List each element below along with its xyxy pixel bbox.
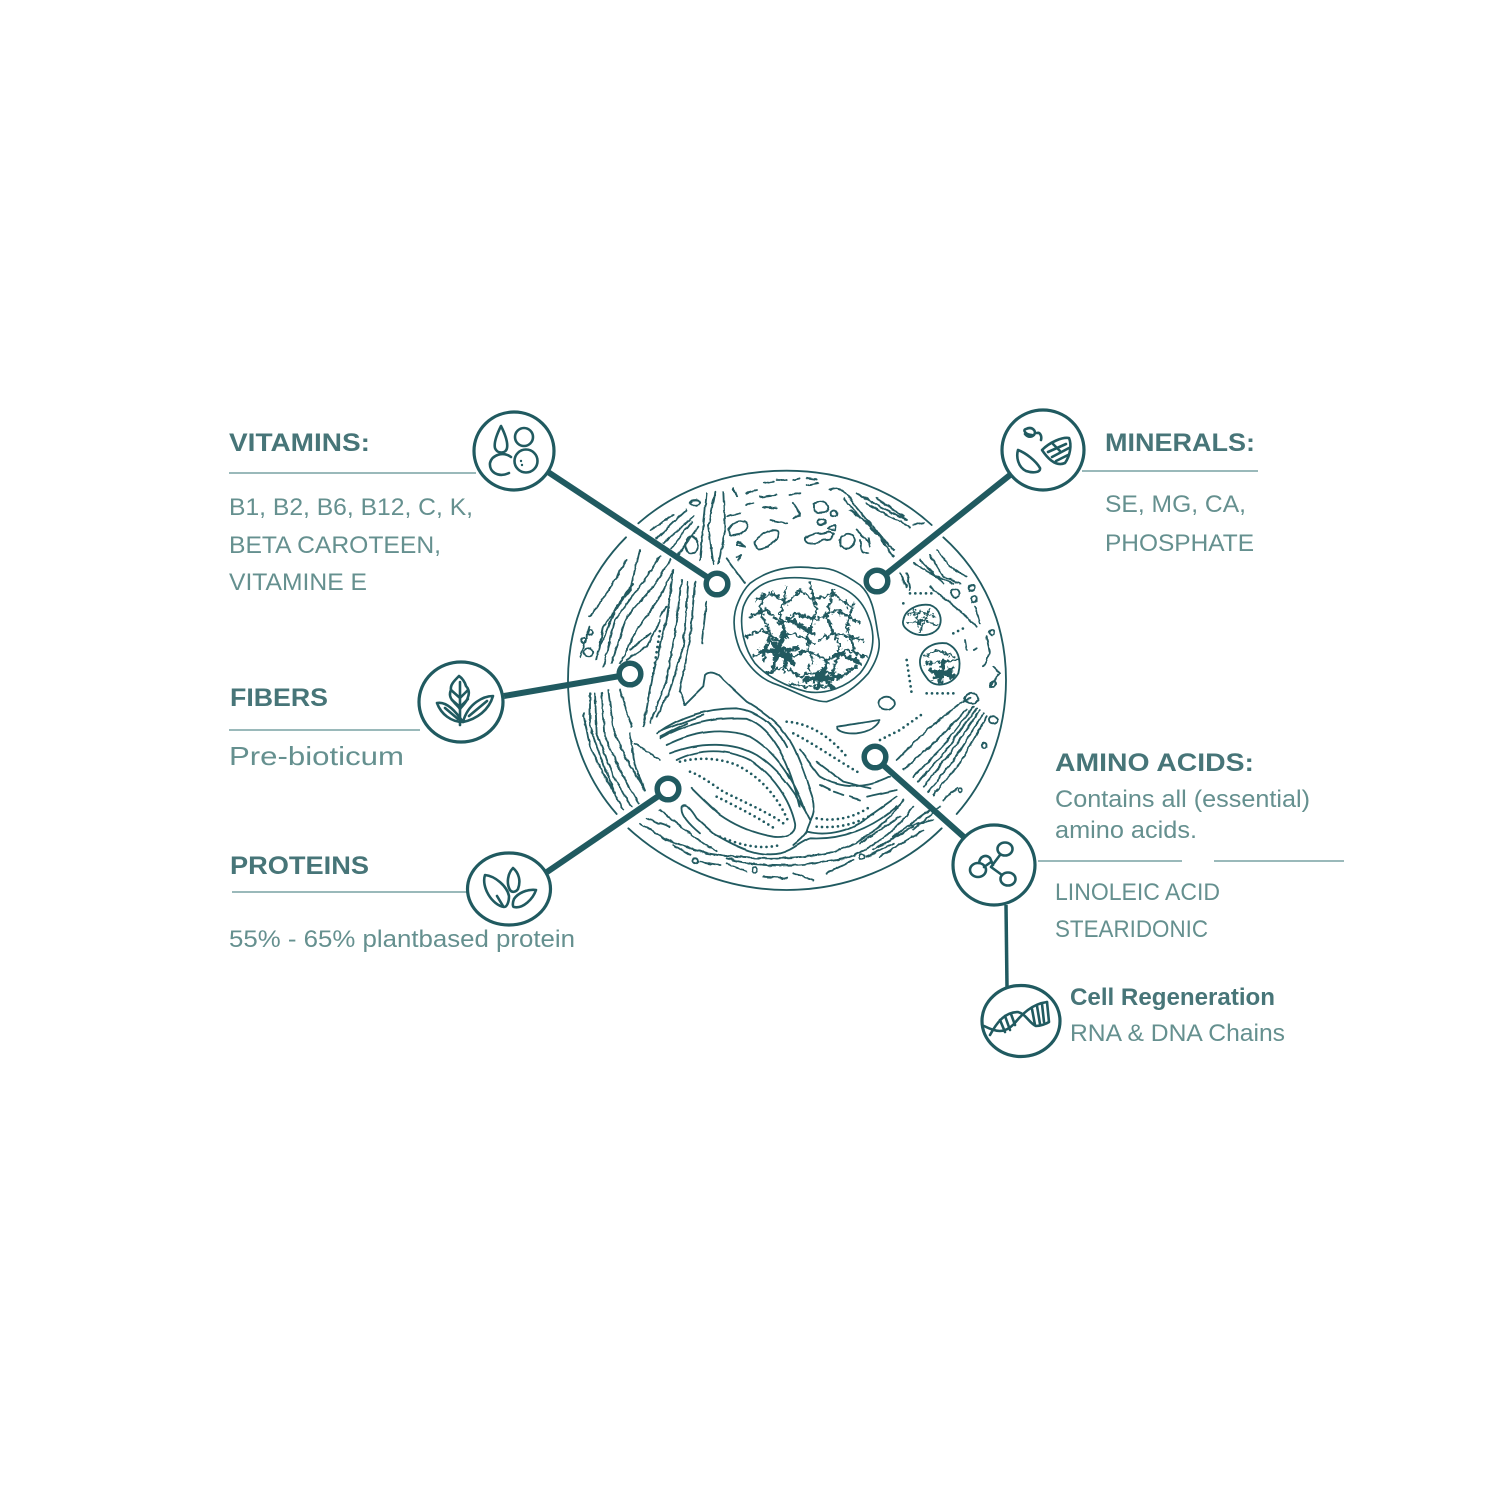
panel: proteins — [229, 852, 575, 953]
connector: vitamins — [548, 472, 710, 579]
text: amino acid list — [1055, 879, 1220, 943]
text: vitamin list — [229, 494, 473, 596]
text: fibers description: Pre-bioticum — [229, 741, 404, 771]
icon: amino acids molecule — [953, 825, 1035, 905]
connector: amino acids — [882, 764, 965, 838]
lower left strands — [583, 690, 660, 810]
panel: minerals — [1002, 410, 1258, 557]
connector: fibers — [504, 676, 620, 696]
top right strands — [830, 489, 923, 557]
icon: proteins leaves — [468, 853, 550, 925]
heading: minerals: MINERALS: — [1105, 429, 1255, 457]
connector: cell regeneration — [1006, 905, 1007, 987]
node: proteins — [657, 778, 679, 800]
text: vitamin list: BETA CAROTEEN, — [229, 532, 441, 559]
heading: proteins: PROTEINS — [230, 852, 369, 880]
bottom strands — [640, 807, 940, 880]
text: amino acid list: LINOLEIC ACID — [1055, 879, 1220, 906]
heading: amino acids: AMINO ACIDS: — [1055, 749, 1254, 777]
panel: cell regeneration — [982, 984, 1285, 1056]
node: vitamins — [706, 573, 728, 595]
text: vitamin list: VITAMINE E — [229, 569, 367, 596]
small vesicle and bar — [837, 720, 880, 733]
icon: minerals stones — [1002, 410, 1084, 490]
icon: dna helix — [982, 986, 1060, 1056]
text: vitamin list: B1, B2, B6, B12, C, K, — [229, 494, 473, 521]
top left strands — [650, 492, 725, 563]
mitochondrion — [657, 558, 897, 854]
dotted granules — [653, 593, 967, 847]
left strands — [580, 550, 707, 727]
text: mineral list: PHOSPHATE — [1105, 530, 1254, 557]
text: cell regeneration description: RNA & DNA Chains — [1070, 1020, 1285, 1047]
nucleus chromatin — [747, 583, 867, 688]
node: minerals — [866, 570, 888, 592]
text: amino acids description: amino acids. — [1055, 817, 1197, 844]
text: amino acids description — [1055, 786, 1310, 844]
connector: minerals — [885, 475, 1010, 575]
heading: vitamins: VITAMINS: — [229, 429, 370, 457]
cell illustration — [568, 471, 1006, 890]
icon: vitamins drop and circles — [474, 412, 554, 490]
top centre marks — [727, 478, 818, 523]
text: amino acids description: Contains all (essential) — [1055, 786, 1310, 813]
text: mineral list — [1105, 491, 1254, 557]
small organelles — [903, 605, 960, 685]
text: amino acid list: STEARIDONIC — [1055, 916, 1208, 943]
text: mineral list: SE, MG, CA, — [1105, 491, 1246, 518]
panel: fibers — [229, 662, 503, 771]
lower right strands — [897, 693, 987, 800]
panel: amino acids — [953, 749, 1344, 943]
heading: cell regeneration: Cell Regeneration — [1070, 984, 1275, 1011]
panel: vitamins — [229, 412, 554, 596]
node: fibers — [619, 663, 641, 685]
nucleus — [734, 567, 879, 702]
connector: proteins — [547, 795, 660, 872]
icon: fibers wheat plant — [419, 662, 503, 742]
text: proteins description: 55% - 65% plantbased protein — [229, 926, 575, 953]
node: amino acids — [864, 746, 886, 768]
organelle strands — [580, 478, 1000, 880]
right strands — [900, 550, 980, 627]
heading: fibers: FIBERS — [230, 684, 328, 712]
cell outer membrane — [568, 471, 1006, 890]
